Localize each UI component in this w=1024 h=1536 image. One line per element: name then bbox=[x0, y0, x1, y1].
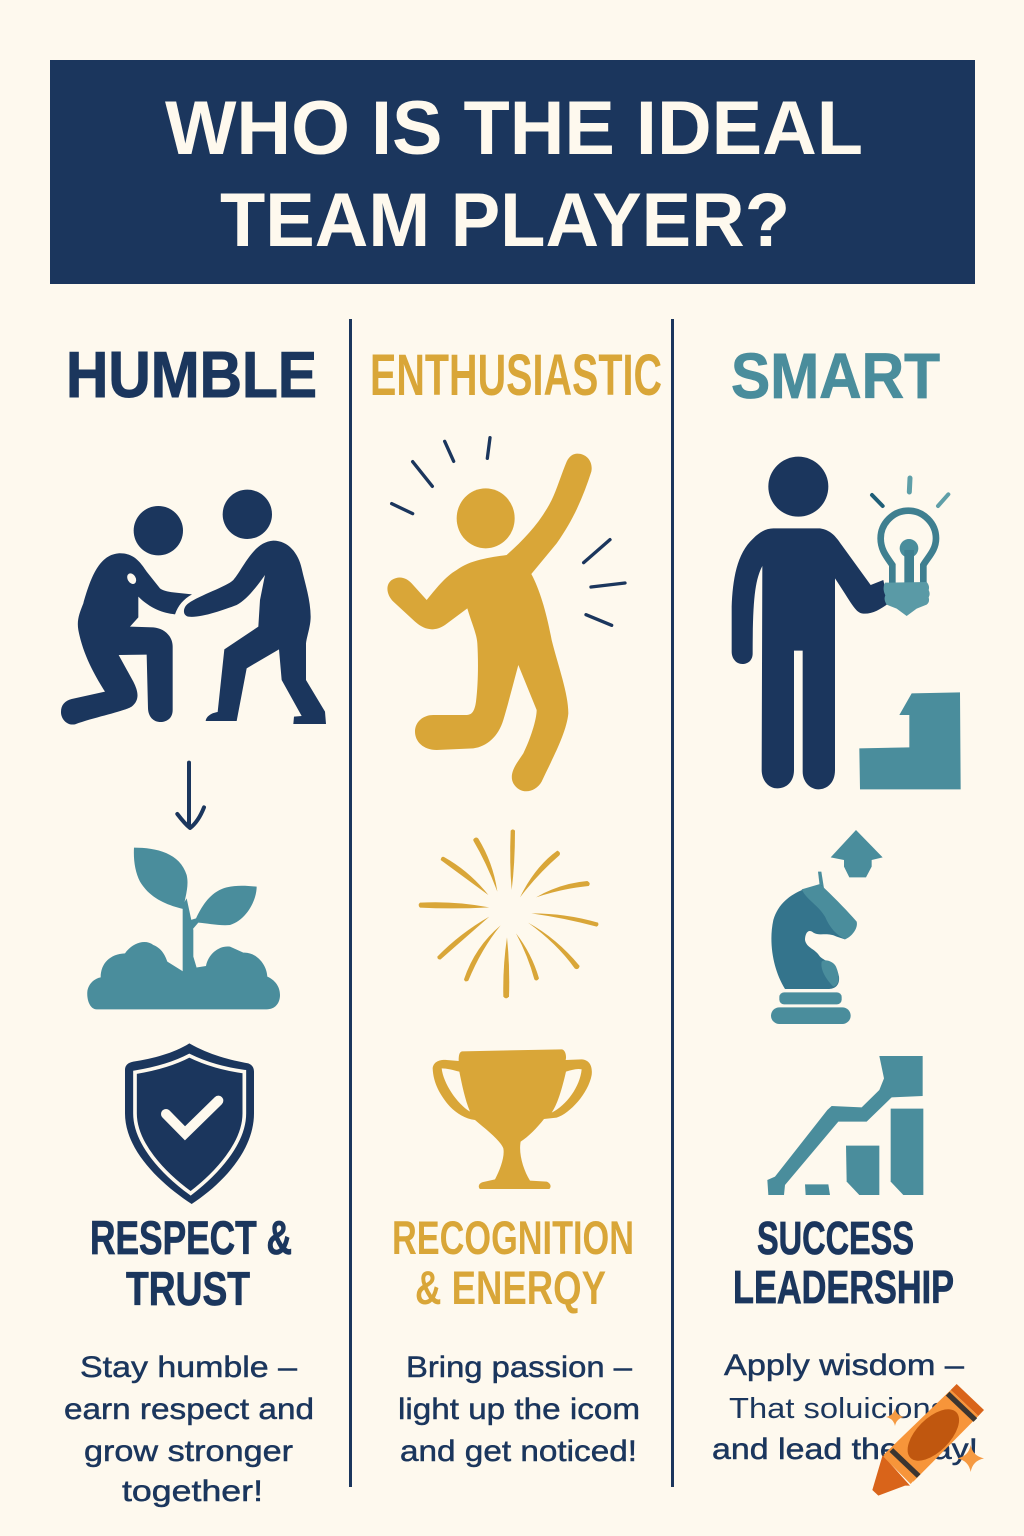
text: humble description bbox=[64, 1351, 314, 1508]
panel: humble bbox=[61, 338, 326, 1508]
text: humble description: earn respect and bbox=[64, 1393, 314, 1426]
icon: orange crayon with sparkles bbox=[872, 1384, 984, 1496]
text: humble description: Stay humble – bbox=[80, 1351, 297, 1384]
icon: trophy bbox=[433, 1049, 592, 1189]
arrow: down bbox=[177, 763, 204, 828]
icon: sprout bbox=[87, 848, 280, 1009]
text: enthusiastic description: Bring passion – bbox=[406, 1351, 632, 1384]
title banner bbox=[50, 60, 975, 284]
subheading: success leadership bbox=[733, 1212, 954, 1313]
subheading: recognition and energy bbox=[392, 1211, 634, 1314]
text: enthusiastic description: and get noticed! bbox=[400, 1435, 637, 1468]
icon: chess knight with arrow bbox=[771, 830, 883, 1024]
title banner: WHO IS THE IDEAL bbox=[165, 86, 863, 171]
icon: shield with check bbox=[125, 1043, 254, 1204]
text: humble description: grow stronger bbox=[84, 1435, 293, 1468]
icon: person with light bulb bbox=[732, 457, 948, 789]
text: smart description: That soluicions bbox=[729, 1393, 947, 1425]
panel: enthusiastic bbox=[370, 343, 662, 1468]
heading: enthusiastic: ENTHUSIASTIC bbox=[370, 343, 662, 408]
text: humble description: together! bbox=[122, 1475, 263, 1508]
heading: smart: SMART bbox=[731, 340, 940, 412]
subheading: respect and trust: RESPECT & bbox=[90, 1211, 292, 1264]
icon: firework burst bbox=[419, 829, 598, 998]
icon: jumping person bbox=[387, 438, 625, 791]
subheading: recognition and energy: & ENERQY bbox=[415, 1261, 606, 1314]
text: smart description: and lead the way! bbox=[712, 1433, 978, 1466]
heading: humble: HUMBLE bbox=[66, 338, 317, 411]
icon: two people helping bbox=[61, 490, 326, 725]
subheading: respect and trust: TRUST bbox=[126, 1262, 250, 1315]
icon: stairs bbox=[859, 692, 961, 789]
text: smart description: Apply wisdom – bbox=[724, 1349, 964, 1382]
icon: growth chart bbox=[767, 1056, 923, 1195]
title banner: TEAM PLAYER? bbox=[220, 178, 790, 263]
text: smart description bbox=[712, 1349, 978, 1466]
text: enthusiastic description bbox=[398, 1351, 640, 1468]
subheading: success leadership: SUCCESS bbox=[757, 1212, 914, 1264]
text: enthusiastic description: light up the icom bbox=[398, 1393, 640, 1426]
subheading: respect and trust bbox=[90, 1211, 292, 1315]
subheading: success leadership: LEADERSHIP bbox=[733, 1261, 954, 1313]
subheading: recognition and energy: RECOGNITION bbox=[392, 1211, 634, 1264]
panel: smart bbox=[712, 340, 978, 1466]
